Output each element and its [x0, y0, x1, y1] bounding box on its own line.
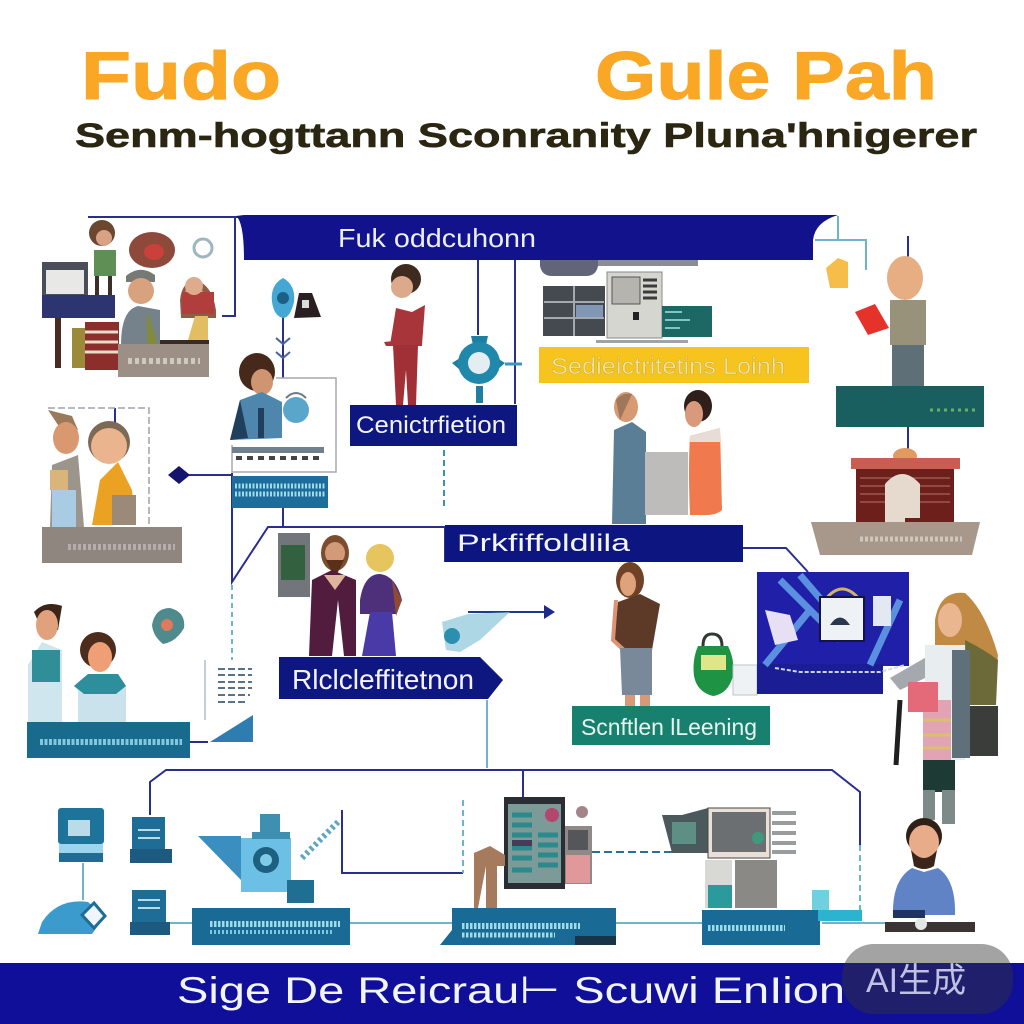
footer band: [0, 963, 1024, 1024]
figure: woman brown top: [613, 562, 660, 706]
banner: Sedieictritetins Loinh: Sedieictritetins Loinh: [551, 353, 785, 379]
banner: Prkfiffoldlila: [445, 525, 743, 562]
panel: bottom data bar right: [702, 890, 862, 945]
figure: woman at screen: [230, 353, 336, 473]
badge: AI generated: [842, 944, 1013, 1014]
icon: pin: [152, 608, 184, 644]
arrow: left pointing: [168, 466, 190, 484]
icon: yellow mascot: [826, 258, 848, 288]
figure: long hair woman: [890, 593, 998, 824]
panel: teal block: [836, 386, 984, 427]
icon: gear circle: [452, 336, 522, 403]
document with chart: [205, 660, 253, 742]
scene: people top left: [42, 220, 216, 377]
banner: Cenictrfietion: [350, 405, 517, 446]
panel: bottom data bar centre: [440, 908, 616, 945]
figure: top right person: [855, 256, 926, 388]
banner: Scnftlen lLeening: Scnftlen lLeening: [581, 714, 757, 740]
banner: Fuk oddcuhonn: Fuk oddcuhonn: [338, 223, 536, 253]
banner: Sedieictritetins Loinh: [539, 347, 809, 383]
figures: couple centre-left: [278, 533, 402, 656]
panel: grey base left: [42, 527, 182, 563]
connector lines: [88, 217, 908, 873]
subtitle: Senm-hogttann Sconranity Pluna'hnigerer: [75, 117, 977, 155]
arrow: data flow right: [442, 605, 555, 652]
figures: two people handing: [612, 390, 722, 524]
figures: couple lower left: [28, 604, 126, 722]
icon: blue chip: [272, 278, 321, 358]
title: Gule Pah: Gule Pah: [595, 38, 937, 114]
machine: computer terminal: [474, 797, 592, 908]
banner: Cenictrfietion: Cenictrfietion: [356, 412, 506, 439]
teal connector lines: [83, 216, 885, 923]
figure: bearded man at desk: [885, 818, 975, 932]
banner: Rlclcleffitetnon: Rlclcleffitetnon: [292, 664, 474, 695]
panel: blue screen: [757, 572, 909, 694]
building: [811, 448, 980, 555]
icon: green lock bag: [694, 634, 757, 696]
machines top centre: [540, 260, 712, 343]
banner: Rlclcleffitetnon: [279, 657, 503, 699]
banner: Prkfiffoldlila: Prkfiffoldlila: [457, 530, 631, 557]
banner: Scnftlen lLeening: [572, 706, 770, 745]
panel: bottom data bar left: [192, 908, 350, 945]
banner: Fuk oddcuhonn: [236, 215, 838, 260]
title: Fudo: Fudo: [81, 38, 281, 114]
figure: man in red suit: [384, 264, 425, 405]
machine: desktop station: [662, 808, 796, 908]
machine: funnel unit: [198, 814, 340, 903]
footer band: Sige De Reicrau⊢ Scuwi EnIion: [177, 970, 845, 1011]
icons: bottom left devices: [38, 808, 172, 935]
data bar: [232, 476, 328, 508]
badge: AI generated: AI生成: [866, 962, 966, 1000]
panel: teal data bar: [27, 722, 190, 758]
figures: two people left: [48, 408, 149, 527]
